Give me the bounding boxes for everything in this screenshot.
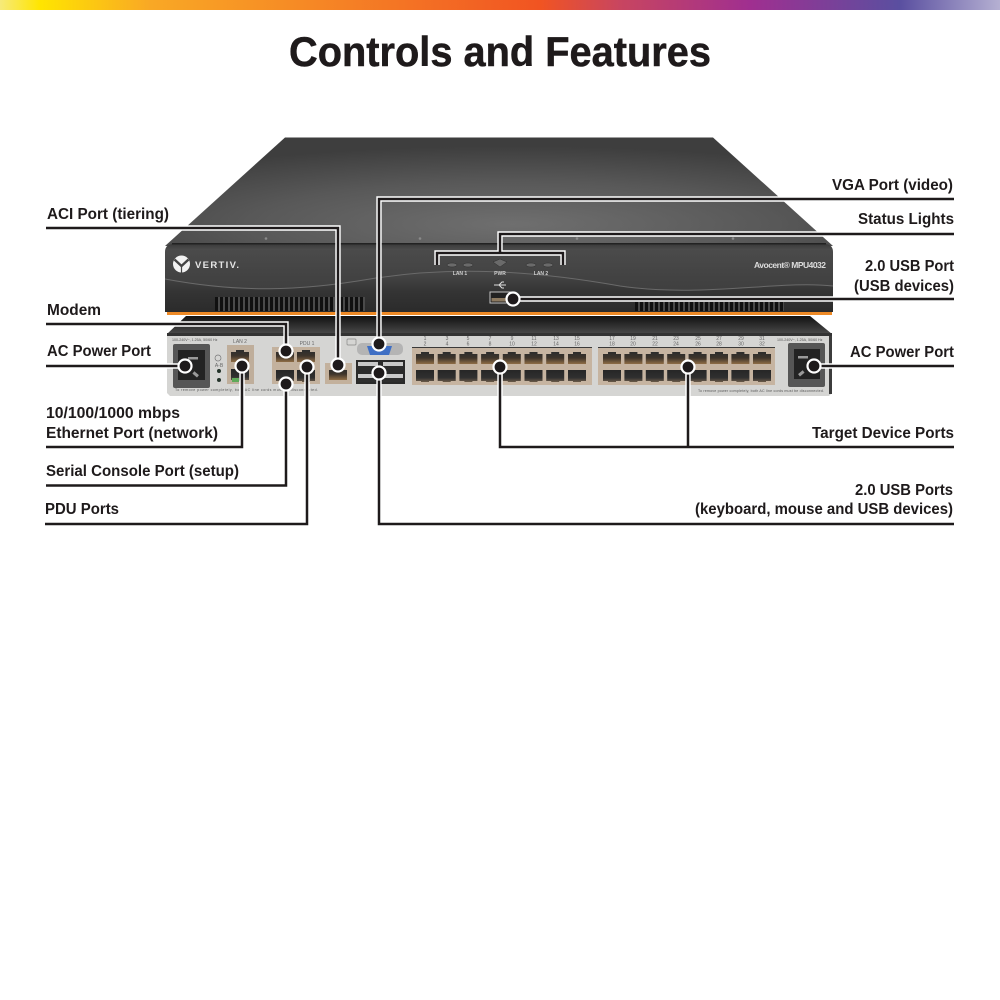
callout: Ethernet Port: 10/100/1000 mbps — [46, 405, 180, 422]
ACI port — [325, 363, 352, 384]
safety notices — [175, 388, 824, 393]
rated power text: 100-240V~, 1.25A, 50/60 Hz — [172, 338, 218, 342]
callout: rear USB Ports: (keyboard, mouse and USB devices) — [695, 501, 953, 518]
port numbers: 10 — [509, 342, 515, 348]
callout: rear USB Ports — [372, 366, 954, 524]
modem and PDU port block — [272, 341, 320, 384]
LAN port block — [227, 339, 254, 384]
port numbers: 28 — [716, 342, 722, 348]
left vent grille — [215, 297, 365, 311]
callout: Ethernet Port — [46, 360, 248, 447]
port numbers: 2 — [424, 342, 427, 348]
port numbers: 25 — [695, 336, 701, 342]
port numbers: 18 — [609, 342, 615, 348]
port numbers: 3 — [446, 336, 449, 342]
rated power text — [172, 338, 823, 342]
port numbers: 11 — [531, 336, 537, 342]
callout: front USB Port: 2.0 USB Port — [865, 258, 955, 275]
port numbers: 23 — [673, 336, 679, 342]
callout: Target Device Ports: Target Device Ports — [812, 425, 954, 442]
safety notices: To remove power completely, both AC line cords must be disconnected. — [175, 388, 318, 392]
LED captions — [453, 271, 548, 277]
status LEDs — [447, 259, 553, 267]
front face lower band — [165, 271, 833, 312]
callout: right AC Power Port: AC Power Port — [850, 344, 955, 361]
callout: ACI Port — [46, 206, 344, 372]
title: Controls and Features — [289, 28, 711, 75]
callout: Target Device Ports — [494, 360, 954, 447]
callout: PDU Ports: PDU Ports — [45, 501, 119, 518]
callout: front USB Port — [506, 258, 955, 306]
callout: Modem — [46, 302, 292, 358]
port numbers: 20 — [630, 342, 636, 348]
left AC socket — [173, 344, 210, 388]
port numbers: 4 — [446, 342, 449, 348]
callout: ACI Port: ACI Port (tiering) — [47, 206, 169, 223]
callout: Status Lights: Status Lights — [858, 211, 954, 228]
callout: VGA Port — [372, 177, 954, 350]
port numbers: 5 — [467, 336, 470, 342]
top surface of front unit — [165, 138, 833, 246]
LAN port block: LAN 2 — [233, 339, 247, 345]
port numbers: 31 — [759, 336, 765, 342]
lid seam — [172, 243, 826, 244]
Vertiv logo mark — [173, 256, 190, 273]
callout: Serial Console Port: Serial Console Port (setup) — [46, 463, 239, 480]
port numbers: 6 — [467, 342, 470, 348]
power symbol and A-B LEDs — [215, 355, 224, 382]
rear panel right edge — [829, 334, 832, 394]
callout: Status Lights — [437, 211, 954, 265]
callout: Ethernet Port: Ethernet Port (network) — [46, 425, 218, 442]
callout: right AC Power Port — [808, 344, 955, 372]
port numbers: 32 — [759, 342, 765, 348]
port numbers — [424, 336, 765, 348]
target port block 1-16 — [412, 347, 592, 385]
rear top surface — [167, 316, 832, 334]
right vent grille — [635, 302, 784, 311]
safety notices: To remove power completely, both AC line cords must be disconnected. — [698, 389, 824, 393]
USB symbol — [494, 282, 506, 288]
right AC socket — [788, 343, 825, 387]
port numbers: 27 — [716, 336, 722, 342]
callout: Serial Console Port — [46, 378, 292, 486]
gradient top bar — [0, 0, 1000, 10]
rated power text: 100-240V~, 1.25A, 50/60 Hz — [777, 338, 823, 342]
front face — [165, 244, 833, 312]
callout: left AC Power Port: AC Power Port — [47, 343, 152, 360]
callout: rear USB Ports: 2.0 USB Ports — [855, 482, 953, 499]
port numbers: 24 — [673, 342, 679, 348]
VGA connector — [347, 339, 403, 355]
rear silver panel — [167, 334, 832, 396]
port numbers: 30 — [738, 342, 744, 348]
port numbers: 14 — [553, 342, 559, 348]
port numbers: 29 — [738, 336, 744, 342]
callout: front USB Port: (USB devices) — [854, 278, 954, 295]
callout: Modem: Modem — [47, 302, 101, 319]
LED captions: LAN 2 — [534, 271, 548, 277]
power symbol and A-B LEDs: A-B — [215, 363, 224, 369]
front USB port — [490, 292, 513, 303]
front face wave highlight — [165, 271, 833, 290]
model name: Avocent® MPU4032 — [754, 260, 826, 270]
Vertiv wordmark: VERTIV. — [195, 260, 239, 271]
port numbers: 1 — [424, 336, 427, 342]
device: rear unit — [167, 316, 832, 396]
port numbers: 8 — [489, 342, 492, 348]
port numbers: 17 — [609, 336, 615, 342]
USB port stack — [356, 360, 405, 384]
callout: left AC Power Port — [46, 343, 192, 372]
port numbers: 9 — [511, 336, 514, 342]
port numbers: 12 — [531, 342, 537, 348]
device: front unit (Vertiv Avocent MPU4032) — [165, 138, 833, 315]
port numbers: 13 — [553, 336, 559, 342]
target port block 17-32 — [598, 347, 775, 385]
rear panel top edge — [167, 333, 832, 336]
port numbers: 19 — [630, 336, 636, 342]
orange trim — [167, 312, 832, 315]
lid screws — [265, 237, 734, 240]
port numbers: 21 — [652, 336, 658, 342]
callout: PDU Ports — [45, 360, 314, 524]
port numbers: 22 — [652, 342, 658, 348]
port numbers: 16 — [574, 342, 580, 348]
port numbers: 7 — [489, 336, 492, 342]
port numbers: 15 — [574, 336, 580, 342]
modem and PDU port block: PDU 1 — [300, 341, 315, 347]
port numbers: 26 — [695, 342, 701, 348]
callout: VGA Port: VGA Port (video) — [832, 177, 953, 194]
LED captions: LAN 1 — [453, 271, 467, 277]
LED captions: PWR — [494, 271, 506, 277]
